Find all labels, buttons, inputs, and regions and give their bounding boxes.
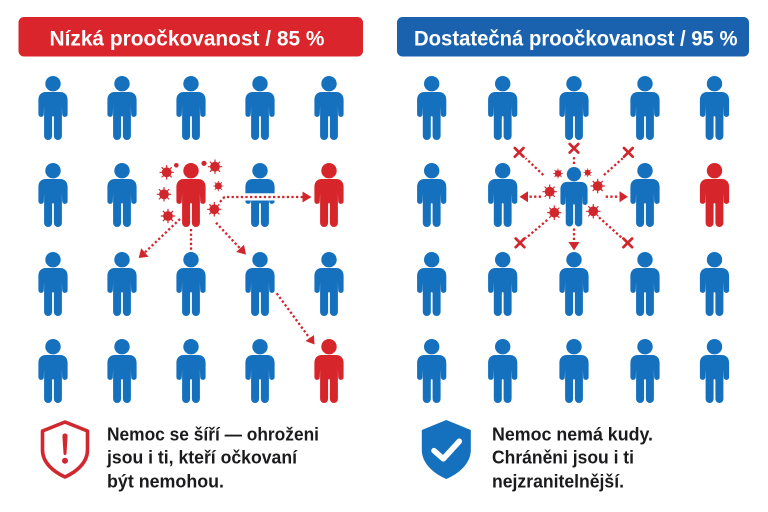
message: disease has nowhere to go: nejzranitelnější. [492,470,624,491]
infected source person [176,163,206,227]
virus particles around source [157,160,223,223]
message: disease spreads: Nemoc se šíří — ohroženi [107,424,319,445]
people grid: sufficient vaccination [417,76,729,403]
heading banner: sufficient vaccination [397,17,749,56]
arrow: left [520,191,541,202]
arrow: down [568,228,580,250]
spread arrow: to infected person, row 4 [277,293,314,344]
people grid: low vaccination [38,76,344,403]
blocked path: down-left [516,220,547,247]
message: disease has nowhere to go: Nemoc nemá kudy. [492,424,653,445]
message: disease spreads [106,424,319,491]
infected person, row 4 [314,339,344,403]
message: disease has nowhere to go: Chráněni jsou i ti [492,446,634,467]
blocked path: up [570,144,578,164]
heading banner: sufficient vaccination: Dostatečná proočkovanost / 95 % [414,28,738,50]
blocked path: up-right [604,148,633,175]
icon: check shield [422,420,471,479]
panel: sufficient vaccination [397,17,749,491]
spread arrow: down-left [139,219,180,258]
single infected person [700,163,729,227]
infected person, row 2 [314,163,344,227]
heading banner: low vaccination: Nízká proočkovanost / 85 % [50,28,325,50]
icon: warning shield [42,422,88,477]
spread arrow: through vaccinated person to infected person [220,192,312,202]
virus particles around central person [543,169,604,219]
message: disease has nowhere to go [492,424,653,491]
message: disease spreads: jsou i ti, kteří očkovaní [106,446,298,467]
message: disease spreads: být nemohou. [107,470,224,491]
arrow: right [606,191,628,202]
heading banner: low vaccination [18,17,363,56]
spread line: down [190,229,192,250]
blocked path: down-right [599,217,632,247]
panel: low vaccination [18,17,363,491]
central protected person [560,167,588,227]
spread arrow: down-right [216,223,246,255]
blocked path: up-left [515,148,543,175]
